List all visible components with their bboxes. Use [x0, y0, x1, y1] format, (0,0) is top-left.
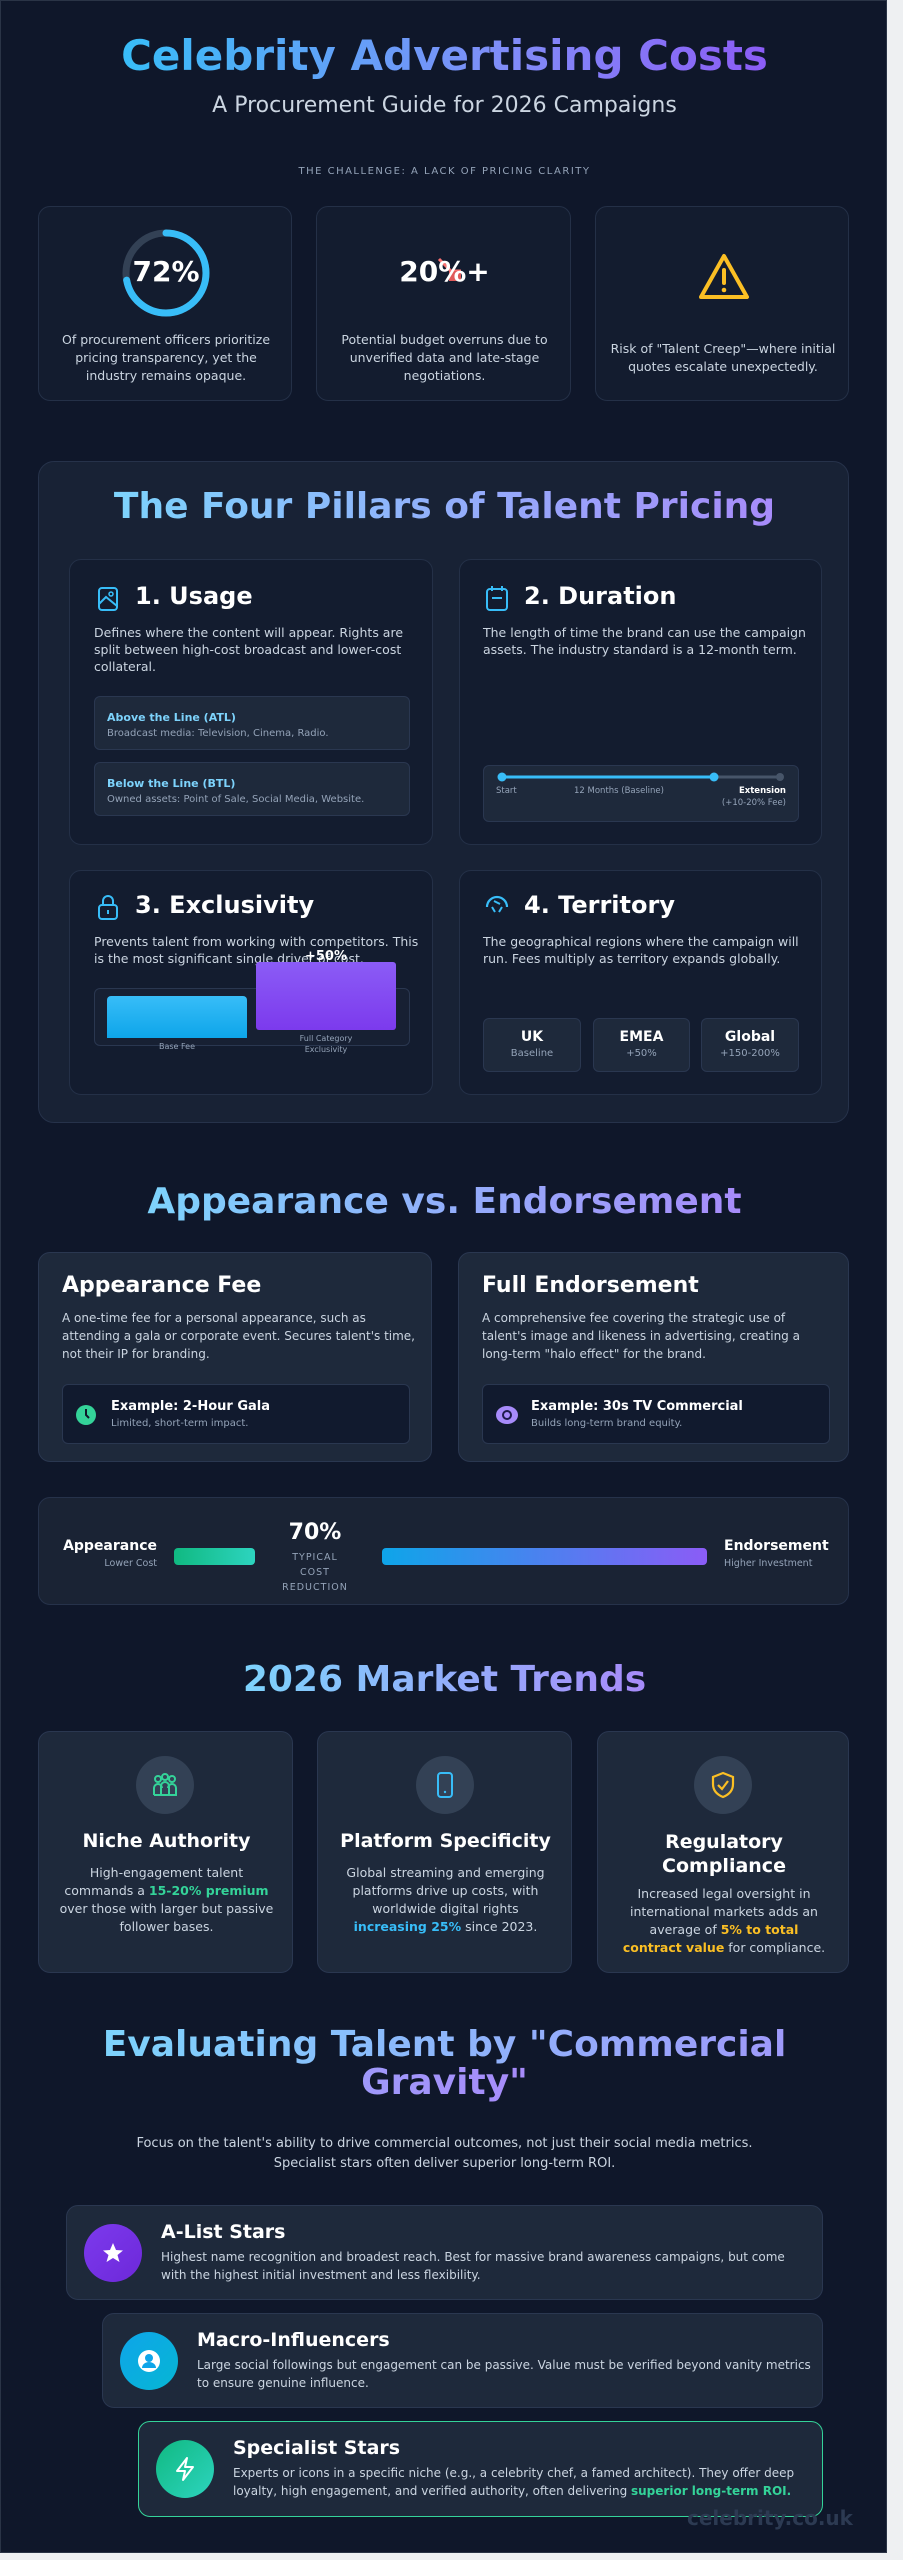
card: full endorsement: A comprehensive fee covering the strategic use of talent's image and likeness in advertising, creating a long-term "halo effect" for the brand.: [482, 1311, 800, 1361]
trend card: niche authority: [38, 1731, 293, 1973]
example box: Example: 2-Hour Gala: [111, 1399, 270, 1414]
comparison bar panel: Endorsement: [724, 1538, 829, 1554]
tiers: UK: [521, 1029, 543, 1045]
stat text: Of procurement officers prioritize pricing transparency, yet the industry remains opaque.: [62, 332, 270, 383]
box: ATL: Broadcast media: Television, Cinema, Radio.: [107, 728, 329, 739]
tier: A-List: [66, 2205, 823, 2300]
example box: Example: 30s TV Commercial: [531, 1399, 743, 1414]
trend card: regulatory compliance: [597, 1731, 849, 1973]
trend card: platform specificity: Global streaming and emerging platforms drive up costs, with worldwide digital rights increasing 25% since 2023.: [346, 1865, 545, 1934]
card: exclusivity: Full Category: [300, 1034, 352, 1043]
icon: calendar: [486, 586, 508, 611]
card: full endorsement: Full Endorsement: [482, 1273, 699, 1298]
title: Celebrity Advertising Costs: [121, 31, 768, 80]
card: territory: [459, 870, 822, 1095]
text: Defines where the content will appear. Rights are split between high-cost broadcast and lower-cost collateral.: [94, 625, 403, 674]
tier: Macro-Influencers: Large social followings but engagement can be passive. Value must be verified beyond vanity metrics to ensure genuine influence.: [197, 2358, 811, 2390]
challenge label: THE CHALLENGE: A LACK OF PRICING CLARITY: [298, 166, 591, 177]
heading: 3. Exclusivity: [135, 891, 314, 919]
heading: market trends: 2026 Market Trends: [243, 1659, 646, 1700]
stat text: Potential budget overruns due to unverified data and late-stage negotiations.: [341, 332, 548, 383]
box: ATL: Above the Line (ATL): [107, 711, 236, 724]
intro text: Focus on the talent's ability to drive commercial outcomes, not just their social media metrics.: [136, 2136, 753, 2151]
icon: phone: [416, 1756, 474, 1814]
heading: The Four Pillars of Talent Pricing: [114, 486, 775, 527]
comparison bar panel: Appearance: [63, 1538, 157, 1554]
tier: Specialist Stars: Experts or icons in a specific niche (e.g., a celebrity chef, a famed architect). They offer deep loyalty, high engagement, and verified authority, often delivering superior long-term ROI.: [233, 2466, 794, 2498]
stat card: 20%+: [316, 206, 571, 401]
tier: Specialist Stars: Specialist Stars: [233, 2437, 400, 2459]
card: territory: Global: [725, 1029, 775, 1045]
timeline: Start: [496, 786, 517, 796]
heading: appearance vs endorsement: Appearance vs. Endorsement: [147, 1181, 742, 1222]
trend card: niche authority: High-engagement talent commands a 15-20% premium over those with larger but passive follower bases.: [60, 1865, 273, 1934]
stat value: 20%+: [399, 255, 490, 288]
icon: shield: [694, 1756, 752, 1814]
trend card: regulatory compliance: Compliance: [662, 1855, 786, 1877]
card: appearance fee: A one-time fee for a personal appearance, such as attending a gala or corporate event. Secures talent's time, not their IP for branding.: [62, 1311, 415, 1361]
text: The geographical regions where the campaign will run. Fees multiply as territory expands globally.: [483, 934, 799, 966]
example box: [62, 1384, 410, 1444]
card: territory: +150-200%: [720, 1048, 780, 1059]
tier: A-List: A-List Stars: [161, 2221, 285, 2243]
trend card: regulatory compliance: Increased legal oversight in international markets adds an average of 5% to total contract value for compliance.: [623, 1886, 825, 1955]
tiers: Baseline: [511, 1048, 553, 1059]
tier: Macro-Influencers: [102, 2313, 823, 2408]
card: full endorsement: [458, 1252, 849, 1462]
intro text: Specialist stars often deliver superior long-term ROI.: [274, 2156, 615, 2171]
example box: Limited, short-term impact.: [111, 1418, 248, 1429]
tiers: [483, 1018, 581, 1072]
heading: 2. Duration: [524, 582, 676, 610]
panel: four pillars: [38, 461, 849, 1123]
timeline: [483, 765, 799, 822]
timeline: (+10-20% Fee): [722, 798, 786, 808]
icon: lock: [98, 895, 118, 920]
stat value: 72%: [132, 255, 200, 288]
timeline: 12 Months (Baseline): [574, 786, 664, 796]
icon: trend: [438, 258, 461, 281]
trend card: regulatory compliance: Regulatory: [665, 1831, 783, 1853]
trend card: platform specificity: Platform Specificity: [340, 1830, 551, 1852]
example box: Builds long-term brand equity.: [531, 1418, 682, 1429]
stat text: Risk of "Talent Creep"—where initial quotes escalate unexpectedly.: [611, 341, 835, 374]
box: BTL: Owned assets: Point of Sale, Social Media, Website.: [107, 794, 364, 805]
heading: commercial gravity: Evaluating Talent by "Commercial Gravity": [103, 2024, 786, 2103]
card: exclusivity: Base Fee: [159, 1042, 195, 1051]
example box: [482, 1384, 830, 1444]
card: appearance fee: [38, 1252, 432, 1462]
card: exclusivity: [69, 870, 433, 1095]
card: territory: EMEA: [620, 1029, 663, 1045]
card: duration: [459, 559, 822, 845]
bar: full exclusivity: [256, 962, 396, 1030]
icon: people: [136, 1756, 194, 1814]
intro text: [136, 2136, 753, 2171]
card: territory: +50%: [626, 1048, 657, 1059]
bar chart: [94, 988, 410, 1046]
icon: warning: [699, 254, 750, 299]
comparison bar panel: REDUCTION: [282, 1582, 348, 1593]
heading: 1. Usage: [135, 582, 253, 610]
timeline: Extension: [739, 786, 786, 796]
trend card: platform specificity: [317, 1731, 572, 1973]
comparison bar panel: TYPICAL: [292, 1552, 338, 1563]
comparison bar panel: 70%: [289, 1520, 341, 1545]
comparison bar panel: Lower Cost: [104, 1558, 157, 1569]
watermark: celebrity.co.uk: [687, 2506, 853, 2530]
tier: A-List: Highest name recognition and broadest reach. Best for massive brand awareness campaigns, but come with the highest initial investment and less flexibility.: [161, 2250, 785, 2282]
trend card: niche authority: Niche Authority: [83, 1830, 250, 1852]
box: ATL: [94, 696, 410, 750]
comparison bar panel: [38, 1497, 849, 1605]
stat card: talent creep: [595, 206, 849, 401]
card: appearance fee: Appearance Fee: [62, 1273, 261, 1298]
card: usage: [69, 559, 433, 845]
comparison bar panel: Higher Investment: [724, 1558, 812, 1569]
text: The length of time the brand can use the campaign assets. The industry standard is a 12-month term.: [483, 625, 806, 657]
tier: Macro-Influencers: Macro-Influencers: [197, 2329, 390, 2351]
icon: image: [98, 587, 118, 611]
card: exclusivity: +50%: [305, 949, 347, 964]
comparison bar panel: COST: [300, 1567, 330, 1578]
card: exclusivity: Exclusivity: [305, 1045, 347, 1054]
box: BTL: [94, 762, 410, 816]
tier: Specialist Stars: [138, 2421, 823, 2517]
text: Prevents talent from working with competitors. This is the most significant single driver of cost.: [94, 934, 418, 966]
subtitle: A Procurement Guide for 2026 Campaigns: [212, 93, 677, 118]
stat card: 72%: [38, 206, 292, 401]
heading: 4. Territory: [524, 891, 675, 919]
icon: globe: [486, 896, 508, 912]
box: BTL: Below the Line (BTL): [107, 777, 235, 790]
ring chart: [122, 230, 210, 316]
